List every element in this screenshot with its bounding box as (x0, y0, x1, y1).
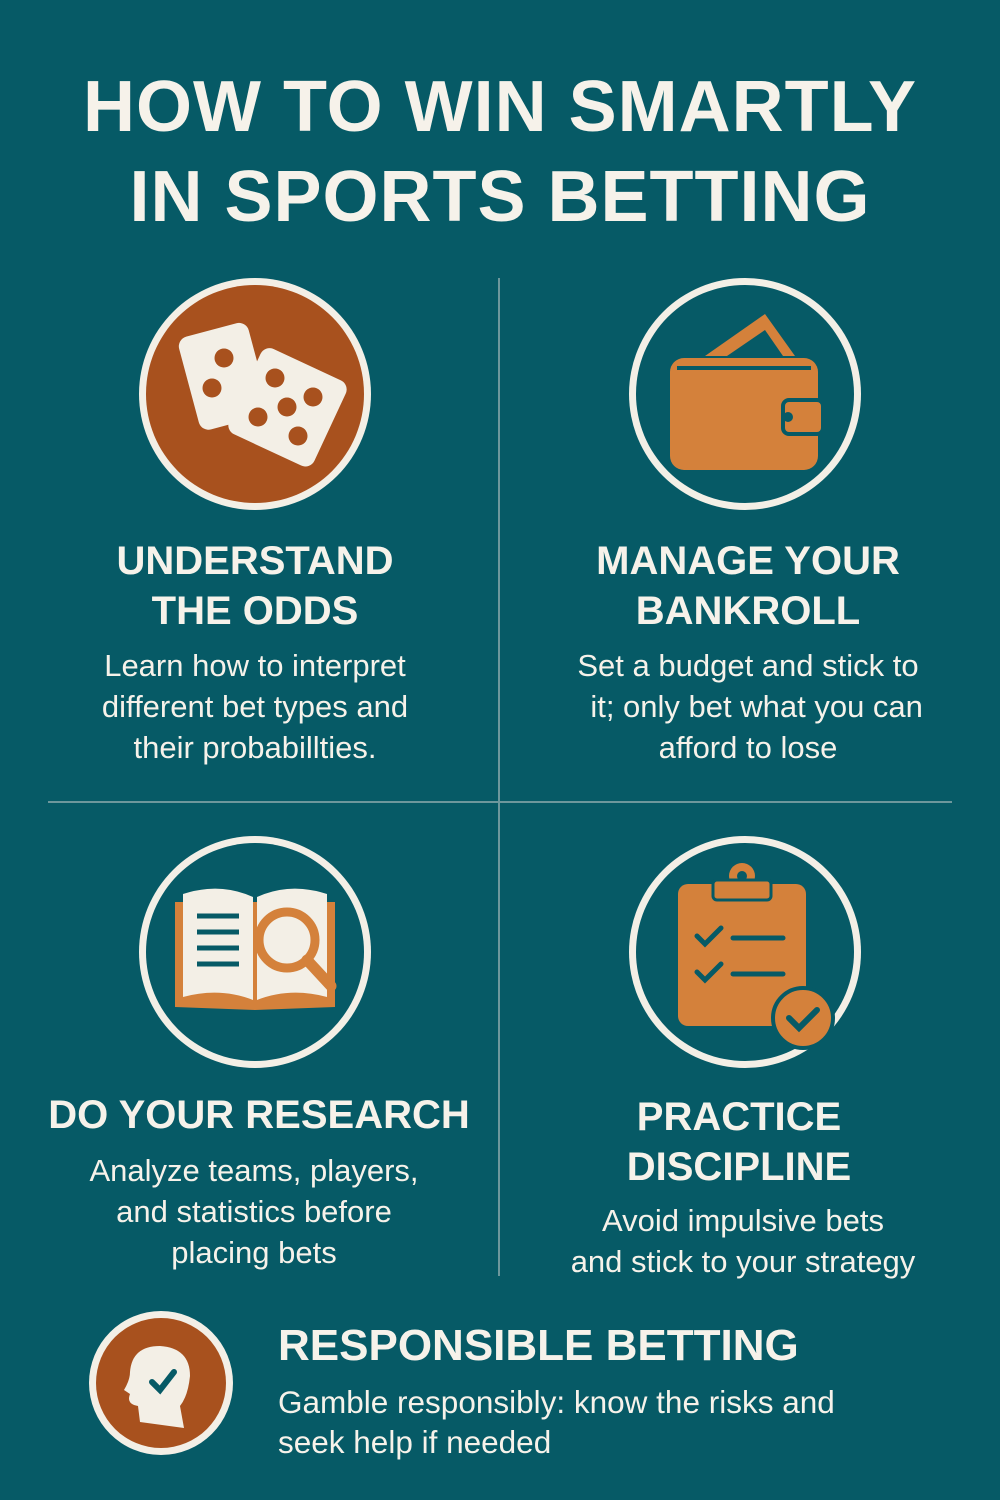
heading: THE ODDS (152, 589, 358, 633)
text: Learn how to interpret (104, 648, 406, 683)
text: afford to lose (659, 730, 837, 765)
text (577, 648, 923, 765)
icon: book and magnifier (139, 836, 371, 1068)
text: different bet types and (102, 689, 408, 724)
text: Gamble responsibly: know the risks and (278, 1384, 835, 1420)
text: and stick to your strategy (571, 1244, 915, 1279)
heading (116, 539, 394, 633)
heading: DO YOUR RESEARCH (48, 1093, 470, 1137)
text: seek help if needed (278, 1424, 551, 1460)
icon: wallet (629, 278, 861, 510)
panel: responsible betting (89, 1311, 835, 1460)
heading: RESPONSIBLE BETTING (278, 1321, 799, 1370)
title (83, 67, 917, 237)
icon: head with check (89, 1311, 233, 1455)
text: Avoid impulsive bets (602, 1203, 884, 1238)
heading: BANKROLL (636, 589, 860, 633)
text: Set a budget and stick to (577, 648, 919, 683)
heading (627, 1095, 851, 1189)
heading (596, 539, 900, 633)
text: it; only bet what you can (590, 689, 923, 724)
title: IN SPORTS BETTING (129, 157, 871, 237)
text: their probabillties. (134, 730, 376, 765)
heading: UNDERSTAND (116, 539, 394, 583)
heading: PRACTICE (637, 1095, 841, 1139)
text (278, 1384, 835, 1460)
panel: manage bankroll (577, 278, 923, 765)
text (571, 1203, 916, 1279)
heading: MANAGE YOUR (596, 539, 900, 583)
text (89, 1153, 419, 1270)
panel: research (48, 836, 470, 1270)
heading: DISCIPLINE (627, 1145, 851, 1189)
panel: discipline (571, 836, 916, 1279)
panel: understand the odds (102, 278, 408, 765)
text: and statistics before (116, 1194, 392, 1229)
icon: dice (139, 278, 371, 510)
text: placing bets (171, 1235, 337, 1270)
title: HOW TO WIN SMARTLY (83, 67, 917, 147)
text (102, 648, 408, 765)
icon: clipboard (629, 836, 861, 1068)
text: Analyze teams, players, (89, 1153, 419, 1188)
